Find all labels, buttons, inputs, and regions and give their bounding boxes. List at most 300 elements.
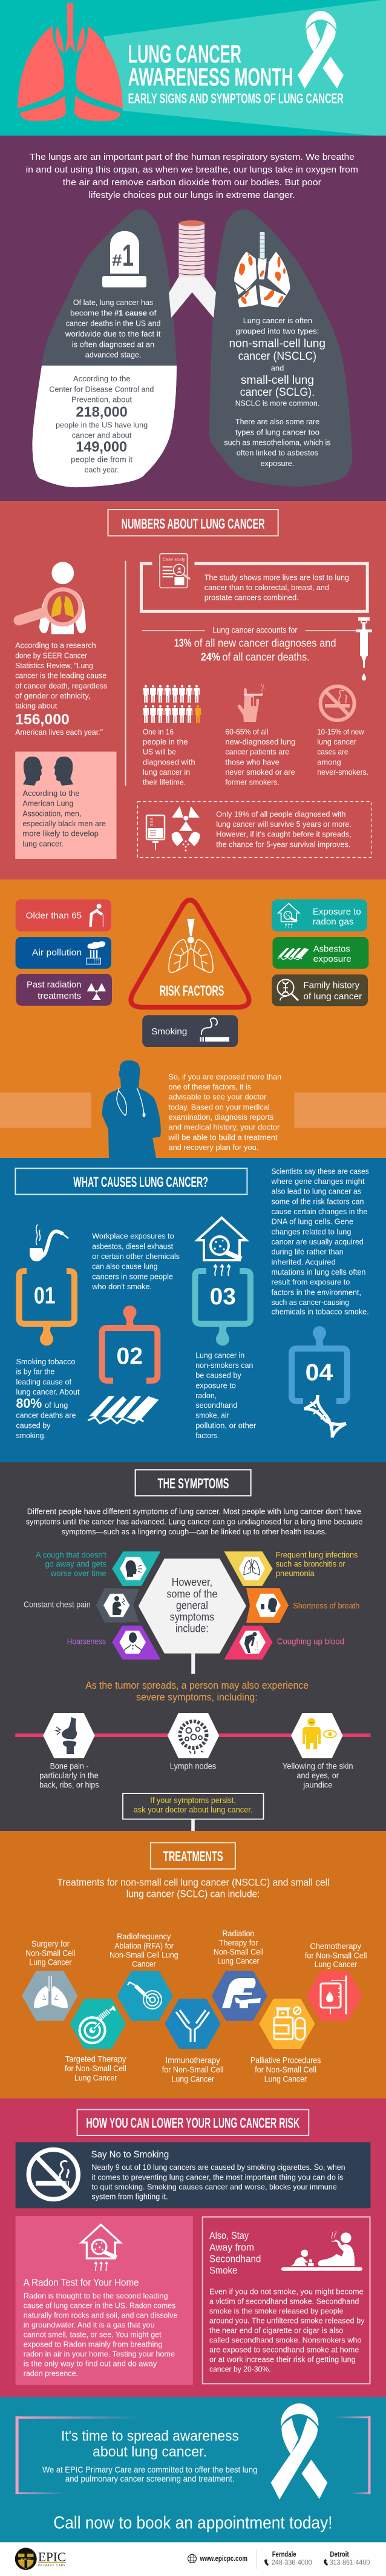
text: one in sixteen: people in the [143, 737, 188, 746]
title: AWARENESS MONTH [128, 63, 293, 91]
text: spread awareness: We at EPIC Primary Care are committed to offer the best lung [42, 2465, 257, 2474]
logo: EPIC [38, 2550, 66, 2564]
heading: TREATMENTS [163, 1848, 223, 1865]
text: number one cause: Of late, lung cancer has [73, 298, 154, 307]
treatment: radiation therapy: Lung Cancer [217, 1956, 260, 1966]
text: one in sixteen: US will be [143, 748, 176, 757]
text: one in sixteen: diagnosed with [143, 757, 195, 766]
left lung shape [32, 209, 177, 487]
heading [136, 1470, 251, 1496]
text: types of lung cancer [224, 316, 331, 468]
symptom: hoarseness: Hoarseness [67, 1637, 106, 1646]
text: one in sixteen [143, 727, 195, 787]
icon: IV bag [146, 815, 165, 850]
panel: say no to smoking: it comes to preventing lung cancer, the most important thing you can do is [91, 2172, 344, 2181]
text: types of lung cancer: such as mesothelioma, which is [224, 438, 331, 447]
text: smoking tobacco: leading cause of [16, 1377, 71, 1386]
text: gene changes [271, 1166, 369, 1316]
callout: American Lung Association: Association, men, [22, 809, 81, 818]
treatment: radiofrequency ablation: Radiofrequency [117, 1931, 171, 1941]
text: non-smokers: Lung cancer in [195, 1350, 244, 1359]
contact: Ferndale: 248-336-4000 [272, 2559, 312, 2566]
text: tumor spreads: severe symptoms, including: [136, 1691, 258, 1703]
symptom: chest pain: Constant chest pain [24, 1599, 91, 1609]
treatment: chemotherapy: Chemotherapy [310, 1941, 361, 1951]
cause 03 radon: 03 [210, 1284, 236, 1310]
footer [0, 2542, 386, 2576]
text: types of lung cancer: types of lung cancer too [235, 427, 319, 436]
panel: case study: cancer than to colorectal, breast, and [204, 583, 329, 592]
icon: gravestone number one [102, 231, 146, 288]
text: symptoms intro: symptoms—such as a lingering cough—can be linked up to other health issues. [62, 1527, 327, 1536]
text: CDC statistics: people in the US have lung [56, 421, 148, 430]
text: number one cause: become the [70, 308, 113, 317]
panel: treatments [0, 1831, 386, 2098]
panel: say no to smoking: system from fighting it. [91, 2192, 168, 2201]
treatment: radiation therapy: Non-Small Cell [214, 1947, 264, 1956]
text: symptoms intro: symptoms until the cancer has advanced. Lung cancer can go undiagnosed for a long time because [26, 1517, 362, 1526]
callout: survival rate: lung cancer will survive 5 years or more. [216, 820, 352, 829]
icon: no smoking sign [321, 686, 355, 720]
symptom: chest pain [24, 1588, 139, 1623]
text: number one cause: worldwide due to the fact it [65, 329, 161, 338]
stat: share of cancer deaths: Lung cancer accounts for [212, 625, 298, 635]
text: see your doctor: one of these factors, it is [168, 1082, 251, 1091]
text: gene changes: during life rather than [271, 1247, 344, 1257]
icon: case study document: Case study [163, 557, 185, 562]
panel: secondhand smoke: around you. The unfiltered smoke released by [209, 2316, 365, 2325]
panel: case study: The study shows more lives are lost to lung [204, 573, 349, 582]
treatment: radiofrequency ablation [110, 1931, 178, 2019]
website [188, 2554, 247, 2563]
treatment: radiation therapy [214, 1928, 266, 2019]
stat: share of cancer deaths: of all new cancer diagnoses and [194, 637, 336, 649]
symptom: jaundice [283, 1713, 353, 1789]
treatment: radiofrequency ablation: Cancer [132, 1959, 156, 1968]
icon: person with magnifier [19, 562, 86, 634]
icon: radon house [197, 1218, 246, 1276]
panel: secondhand smoke: Even if you do not smoke, you might become [209, 2287, 364, 2296]
treatment: chemotherapy [305, 1941, 367, 2019]
panel: secondhand smoke: Also, Stay [209, 2230, 249, 2241]
text: gene changes: Scientists say these are cases [271, 1166, 369, 1175]
text: types of lung cancer: cancer (NSCLC) [238, 350, 316, 363]
panel: secondhand smoke: are exposed to secondhand smoke at home [209, 2345, 359, 2354]
text: gene changes: such as cancer-causing [271, 1298, 349, 1307]
panel: secondhand smoke: a victim of secondhand smoke. Secondhand [209, 2297, 359, 2306]
symptom: coughing blood: Coughing up blood [277, 1637, 344, 1646]
symptom: cough: go away and gets [45, 1559, 106, 1569]
treatment: targeted therapy: for Non-Small Cell [65, 2063, 126, 2073]
treatment: palliative procedures: Palliative Procedures [250, 2055, 321, 2065]
text: SEER statistics: cancer is the leading cause [15, 671, 106, 680]
panel: secondhand smoke: Secondhand [209, 2253, 261, 2264]
text: never smoked patients: those who have [225, 757, 280, 766]
icon: syringe [356, 617, 372, 681]
treatment: radiation therapy: Radiation [223, 1928, 254, 1938]
treatment: radiation therapy: Therapy for [219, 1937, 258, 1947]
symptom: cough: A cough that doesn't [36, 1549, 106, 1559]
stat: share of cancer deaths [142, 625, 357, 663]
risk: asbestos exposure: Asbestos [313, 944, 350, 954]
panel: radon test: is the only way to find out and do away [24, 2359, 157, 2368]
risk: past radiation treatments: Past radiation [27, 980, 81, 990]
heading [151, 1842, 235, 1869]
cause 03 radon [195, 1271, 250, 1346]
risk: older than 65: Older than 65 [26, 911, 82, 921]
text: smoking tobacco: 80% [16, 1396, 42, 1411]
text: gene changes: inherited. Acquired [271, 1257, 336, 1266]
text: workplace exposures: asbestos, diesel exhaust [92, 1241, 173, 1250]
text: one in sixteen: lung cancer in [143, 767, 190, 777]
text: CDC statistics: each year. [85, 465, 119, 475]
center hexagon: symptoms [170, 1611, 214, 1623]
text: workplace exposures [91, 1232, 180, 1291]
text: CDC statistics: 218,000 [76, 404, 128, 420]
text: number one cause: of [149, 308, 157, 317]
text: gene changes: factors in the environment, [271, 1287, 361, 1296]
panel: the symptoms [0, 1462, 386, 1831]
text: never smoked patients [225, 727, 295, 787]
text: workplace exposures: cancers in some people [92, 1272, 173, 1281]
contact: Ferndale: Ferndale [272, 2551, 296, 2558]
heading [77, 2109, 309, 2135]
panel: radon test: radon presence. [24, 2368, 78, 2377]
panel: say no to smoking: to quit smoking. Smoking causes cancer and worse, blocks your immune [91, 2182, 337, 2191]
symptom: coughing blood [224, 1626, 344, 1660]
text: number one cause: #1 cause [114, 308, 147, 317]
treatment: immunotherapy: Lung Cancer [172, 2074, 214, 2083]
text: never smoked patients: cancer patients are [225, 748, 289, 757]
risk: family history: of lung cancer [303, 991, 362, 1002]
text: smoking tobacco: Smoking tobacco [16, 1357, 75, 1366]
text: one in sixteen: their lifetime. [143, 778, 186, 787]
treatment: radiofrequency ablation: Non-Small Cell Lung [110, 1950, 178, 1960]
treatment: palliative procedures [250, 2000, 321, 2083]
icon: coral lungs [18, 3, 123, 121]
cause 02 workplace: 02 [116, 1343, 143, 1369]
text: see your doctor: today. Based on your medical [168, 1102, 270, 1111]
center hexagon [139, 1559, 246, 1654]
contact: Detroit [324, 2551, 370, 2566]
logo [15, 2548, 66, 2570]
panel: risk factors [0, 879, 386, 1158]
text: never smokers: cases are [317, 748, 348, 757]
text: non-smokers: be caused by [195, 1371, 241, 1380]
text: spread awareness: It's time to spread awareness [61, 2428, 239, 2445]
panel: case study: prostate cancers combined. [204, 593, 299, 602]
header banner [0, 0, 386, 136]
risk: asbestos exposure: exposure [313, 954, 352, 964]
website: www.epicpc.com [200, 2555, 247, 2563]
icon: awareness ribbon [271, 2404, 327, 2500]
panel: secondhand smoke: called secondhand smoke. Nonsmokers who [209, 2336, 362, 2345]
text: number one cause: is often diagnosed at an [72, 340, 154, 349]
text: number one cause: advanced stage. [85, 350, 142, 360]
symptom: bone pain: Bone pain - [50, 1761, 89, 1771]
panel: case study [142, 554, 367, 611]
text: smoking tobacco [16, 1357, 80, 1440]
symptom: lung infections: Frequent lung infections [276, 1549, 358, 1559]
warning triangle: RISK FACTORS [160, 983, 224, 999]
text: gene changes: some of the risk factors can [271, 1197, 364, 1206]
text: never smoked patients: former smokers. [225, 778, 280, 787]
treatment: surgery: Lung Cancer [29, 1957, 72, 1967]
cause 02 workplace [102, 1306, 157, 1381]
risk: radon gas: radon gas [313, 917, 353, 927]
heading: NUMBERS ABOUT LUNG CANCER [122, 516, 265, 532]
panel: radon test: naturally from rocks and soil, and can dissolve [24, 2310, 177, 2319]
text: symptoms intro: Different people have different symptoms of lung cancer. Most people with lung cancer don't have [27, 1507, 361, 1516]
symptom: jaundice: jaundice [303, 1779, 333, 1789]
text: SEER statistics: taking about [15, 702, 57, 711]
text: smoking tobacco: caused by [16, 1421, 51, 1430]
panel: what causes lung cancer [0, 1158, 386, 1462]
text: CDC statistics: Prevention, about [71, 395, 132, 404]
symptom: lymph nodes [168, 1713, 219, 1771]
text: non-smokers: exposure to [195, 1381, 236, 1390]
text: non-smokers: factors. [195, 1431, 219, 1440]
treatment: immunotherapy [162, 2000, 224, 2083]
text: SEER statistics: 156,000 [15, 712, 70, 728]
stat: share of cancer deaths: of all cancer deaths. [223, 651, 310, 663]
text: never smokers: never-smokers. [317, 767, 368, 777]
callout: survival rate: the chance for 5-year survival improves. [216, 840, 350, 849]
symptom: lung infections [224, 1549, 358, 1586]
text: CDC statistics: cancer and about [72, 430, 132, 439]
icon: one in sixteen people [143, 685, 201, 723]
contact: Detroit: 313-861-4400 [330, 2559, 370, 2566]
decorative frame [16, 2416, 371, 2494]
text: types of lung cancer: often linked to asbestos [237, 448, 319, 458]
icon: lungs with tumours [234, 232, 290, 307]
text: see your doctor: will be able to build a treatment [168, 1132, 278, 1142]
text: non-smokers: radon, [195, 1391, 217, 1400]
panel: secondhand smoke: Smoke [209, 2265, 237, 2276]
text: smoking tobacco: smoking. [16, 1431, 46, 1440]
icon: DNA helix [304, 1395, 346, 1438]
text: see your doctor: So, if you are exposed more than [168, 1072, 281, 1081]
cause 01 smoking [19, 1271, 74, 1346]
heading [15, 1168, 247, 1194]
text: gene changes: DNA of lung cells. Gene [271, 1217, 353, 1226]
text: types of lung cancer: small-cell lung [241, 374, 314, 387]
risk: past radiation treatments: treatments [38, 991, 81, 1001]
icon: adult smoking near baby [281, 2231, 362, 2271]
warning triangle [131, 900, 249, 1007]
treatment: targeted therapy: Lung Cancer [74, 2072, 117, 2082]
panel: say no to smoking: Say No to Smoking [91, 2149, 169, 2160]
panel: radon test: cause of lung cancer in the US. Radon comes [24, 2301, 176, 2310]
center hexagon: some of the [167, 1588, 217, 1600]
panel: radon test: A Radon Test for Your Home [24, 2277, 139, 2288]
icon: trachea [169, 220, 216, 318]
treatment: chemotherapy: for Non-Small Cell [305, 1950, 367, 1960]
treatment: targeted therapy: Targeted Therapy [65, 2054, 126, 2064]
symptom: jaundice: and eyes, or [296, 1770, 339, 1780]
text: gene changes: cause certain changes in the [271, 1207, 367, 1216]
symptom: shortness of breath [246, 1588, 359, 1623]
text: types of lung cancer: NSCLC is more common. [235, 399, 319, 408]
text: smoking tobacco: of lung [45, 1401, 68, 1410]
panel: radon test: cannot smell, taste, or see. You might get [24, 2330, 162, 2339]
callout: American Lung Association: lung cancer. [22, 839, 64, 848]
cause 01 smoking: 01 [34, 1283, 56, 1309]
text: never smoked patients: 60-65% of all [225, 727, 269, 736]
symptom: jaundice: Yellowing of the skin [283, 1761, 353, 1771]
text: smoking tobacco: cancer deaths are [16, 1411, 76, 1420]
callout: American Lung Association: more likely to develop [22, 829, 99, 838]
heading: THE SYMPTOMS [157, 1476, 229, 1492]
text: never smoked patients: new-diagnosed lung [225, 737, 295, 746]
risk: radon gas [272, 899, 367, 932]
text: one in sixteen: One in 16 [143, 727, 174, 736]
risk: asbestos exposure [272, 937, 368, 969]
treatment: immunotherapy: Immunotherapy [166, 2055, 220, 2065]
panel: radon test: Radon is thought to be the second leading [24, 2291, 168, 2300]
text: never smokers: lung cancer [317, 737, 357, 746]
text: spread awareness: about lung cancer. [93, 2443, 207, 2460]
treatment: chemotherapy: Lung Cancer [315, 1959, 357, 1969]
center hexagon: include: [175, 1623, 209, 1635]
treatment: radiofrequency ablation: Ablation (RFA) for [114, 1940, 174, 1950]
panel: say no to smoking [16, 2142, 371, 2208]
risk: past radiation treatments [16, 974, 112, 1006]
text: non-smokers: non-smokers can [195, 1361, 253, 1370]
panel: lungs intro [0, 136, 386, 501]
text: see your doctor: examination, diagnosis reports [168, 1112, 274, 1122]
center hexagon: general [176, 1599, 208, 1611]
text: gene changes: changes related to lung [271, 1227, 351, 1236]
risk: older than 65 [16, 899, 111, 932]
title [128, 39, 344, 107]
text: CDC statistics: 149,000 [76, 439, 127, 455]
text: treatments intro: lung cancer (SCLC) can include: [126, 1888, 260, 1900]
symptom: bone pain [39, 1713, 99, 1789]
risk: air pollution [16, 937, 111, 969]
text: gene changes: result from exposure to [271, 1278, 350, 1287]
intro text [26, 152, 358, 200]
treatment: palliative procedures: Lung Cancer [264, 2074, 307, 2083]
icon: doctor silhouette [102, 1060, 161, 1158]
text: see your doctor: advisable to see your doctor [168, 1092, 267, 1102]
callout: ask your doctor: If your symptoms persist, [150, 1796, 236, 1805]
panel: secondhand smoke: or at work increase their risk of getting lung [209, 2355, 356, 2364]
risk: air pollution: Air pollution [32, 947, 82, 958]
symptom: cough: worse over time [50, 1568, 106, 1578]
panel: radon test: in groundwater. And it is a gas that you [24, 2320, 155, 2329]
text: gene changes: also lead to lung cancer as [271, 1187, 361, 1196]
text: number one cause: cancer deaths in the US and [66, 319, 160, 328]
panel: radon test: radon in air in your home. Testing your home [24, 2349, 175, 2358]
title: LUNG CANCER [128, 39, 241, 68]
intro text: in and out using this organ, as when we breathe, our lungs take in oxygen from [26, 165, 358, 175]
text: number one cause [65, 298, 161, 360]
icon: no smoking [28, 2150, 78, 2200]
text: SEER statistics: of cancer death, regardless [15, 681, 108, 690]
logo: PRIMARY CARE [38, 2564, 66, 2568]
risk: family history: Family history [303, 981, 360, 991]
text: spread awareness [42, 2428, 257, 2483]
text: gene changes: cancer are usually acquired [271, 1237, 364, 1246]
text: workplace exposures: Workplace exposures to [92, 1232, 174, 1241]
text: non-smokers [195, 1350, 257, 1440]
text: SEER statistics: done by SEER Cancer [15, 651, 88, 660]
text: types of lung cancer: exposure. [261, 459, 294, 468]
right lung shape [209, 209, 352, 487]
icon: awareness ribbon [298, 11, 344, 89]
text: smoking tobacco: lung cancer. About [16, 1387, 80, 1396]
text: gene changes: where gene changes might [271, 1177, 365, 1186]
panel: radon test [16, 2216, 193, 2385]
call to action text: Call now to book an appointment today! [53, 2514, 333, 2533]
heading [108, 510, 278, 536]
text: SEER statistics: of gender or ethnicity, [15, 691, 90, 700]
symptom: lymph nodes: Lymph nodes [170, 1761, 216, 1771]
treatment: immunotherapy: for Non-Small Cell [162, 2065, 224, 2074]
panel: radon test: exposed to Radon mainly from breathing [24, 2339, 163, 2348]
text: types of lung cancer: grouped into two types: [236, 326, 319, 335]
text: never smokers: 10-15% of new [317, 727, 364, 736]
treatment: targeted therapy [65, 2000, 126, 2082]
callout: ask your doctor [123, 1793, 264, 1819]
panel: lower your risk [0, 2098, 386, 2397]
text: types of lung cancer: non-small-cell lung [229, 337, 325, 350]
cause 04 genes: 04 [306, 1360, 333, 1386]
treatment: palliative procedures: for Non-Small Cell [255, 2065, 316, 2074]
text: workplace exposures: who don't smoke. [91, 1282, 152, 1291]
intro text: lifestyle choices put our lungs in extreme danger. [88, 190, 295, 200]
stat: share of cancer deaths: 13% [174, 637, 192, 649]
text: SEER statistics: Statistics Review, "Lung [15, 661, 93, 670]
symptom: cough [36, 1549, 160, 1586]
callout: American Lung Association: According to the [22, 789, 80, 798]
text: symptoms intro [26, 1507, 362, 1536]
callout: American Lung Association: American Lung [22, 799, 73, 808]
risk: radon gas: Exposure to [313, 907, 361, 917]
icon: case study document [160, 554, 189, 588]
risk: family history [272, 974, 368, 1006]
text: types of lung cancer: There are also some rare [235, 417, 319, 426]
icon: tobacco pipe [30, 1224, 68, 1261]
intro text: the air and remove carbon dioxide from our bodies. But poor [63, 177, 321, 188]
heading: WHAT CAUSES LUNG CANCER? [73, 1174, 208, 1191]
text: see your doctor: and medical history, your doctor [168, 1123, 280, 1132]
panel: say no to smoking: Nearly 9 out of 10 lung cancers are caused by smoking cigarettes. So, when [91, 2163, 345, 2172]
intro text: The lungs are an important part of the human respiratory system. We breathe [30, 152, 355, 162]
text: SEER statistics: American lives each year." [15, 728, 103, 737]
text: types of lung cancer: Lung cancer is often [243, 316, 312, 325]
symptom: bone pain: back, ribs, or hips [39, 1779, 99, 1789]
text: smoking tobacco: is by far the [16, 1367, 54, 1376]
text: see your doctor [168, 1072, 281, 1152]
icon: gravestone number one: # [112, 251, 122, 269]
center hexagon: However, [172, 1576, 212, 1588]
text: non-smokers: pollution, or other [195, 1421, 257, 1430]
panel: secondhand smoke: cancer by 20-30%. [209, 2365, 271, 2374]
text: non-smokers: smoke, air [195, 1411, 229, 1420]
symptom: lung infections: pneumonia [276, 1568, 315, 1578]
text: see your doctor: and recovery plan for you. [168, 1143, 258, 1152]
text: workplace exposures: or certain other chemicals [92, 1252, 180, 1261]
icon: radiation and capsule [172, 806, 200, 851]
callout: survival rate: However, if it's caught before it spreads, [216, 830, 352, 839]
callout: American Lung Association [15, 752, 117, 859]
text: SEER statistics [15, 641, 108, 737]
risk: smoking: Smoking [151, 1027, 187, 1037]
icon: exclamation and lungs [169, 919, 213, 973]
text: gene changes: chemicals in tobacco smoke. [271, 1307, 369, 1316]
